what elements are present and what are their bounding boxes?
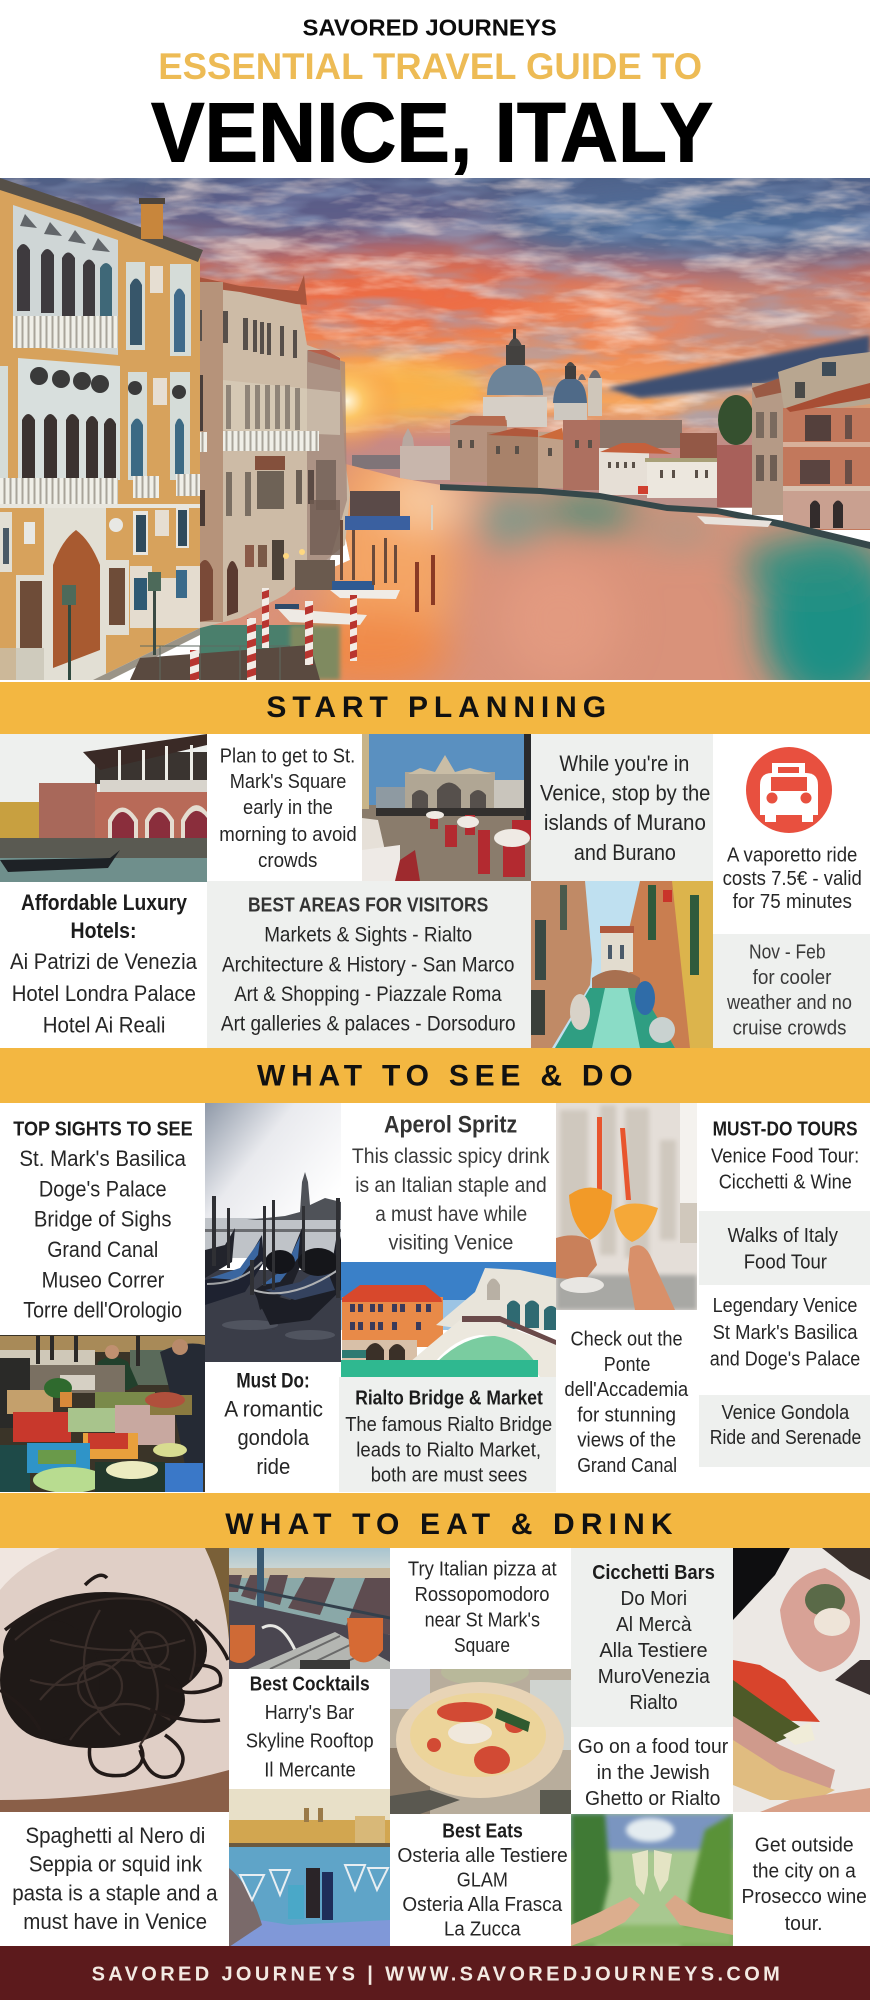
panel: squid ink pasta description: Spaghetti al Nero di <box>26 1823 205 1848</box>
panel: Prosecco wine tour tip: the city on a <box>753 1861 857 1883</box>
panel: must-do tours: Cicchetti & Wine <box>719 1172 852 1194</box>
panel: vaporetto tip: for 75 minutes <box>733 891 852 913</box>
panel: affordable luxury hotels: Hotels: <box>70 918 136 943</box>
panel: must do gondola ride: Must Do: <box>236 1370 310 1393</box>
panel: Rialto Bridge and Market: leads to Rialto Market, <box>356 1440 541 1462</box>
photo: Rialto market produce stall <box>0 1335 205 1492</box>
panel: Prosecco wine tour tip <box>733 1812 870 1946</box>
panel: pizza at Rossopomodoro tip: near St Mark's <box>425 1610 540 1632</box>
panel: Ponte dell'Accademia tip <box>556 1310 699 1492</box>
panel: Walks of Italy tour <box>699 1211 870 1285</box>
footer <box>0 1946 870 2000</box>
panel: affordable luxury hotels <box>0 882 207 1048</box>
panel: Rialto Bridge and Market <box>339 1377 556 1492</box>
panel: gondola ride tour: Venice Gondola <box>722 1402 850 1424</box>
panel: best areas for visitors: Markets & Sights - Rialto <box>264 924 472 947</box>
panel: best eats: Osteria Alla Frasca <box>402 1894 563 1916</box>
distant church and shore <box>352 428 452 480</box>
panel: Rialto Bridge and Market: Rialto Bridge & Market <box>355 1387 543 1409</box>
panel: pizza at Rossopomodoro tip: Square <box>454 1635 510 1657</box>
panel: best time to visit: for cooler <box>753 967 832 989</box>
title: VENICE, ITALY <box>151 86 713 180</box>
panel: must-do tours: Venice Food Tour: <box>711 1146 859 1168</box>
panel: Aperol Spritz: is an Italian staple and <box>355 1174 547 1197</box>
panel: best eats <box>390 1814 571 1947</box>
panel: best cocktails: Harry's Bar <box>265 1702 354 1724</box>
panel: St Mark's Square tip: Mark's Square <box>230 771 346 793</box>
panel: cicchetti bars: Alla Testiere <box>599 1640 708 1662</box>
panel: St Mark's Square tip <box>207 734 362 882</box>
photo: pizza margherita <box>390 1669 571 1814</box>
panel: must do gondola ride <box>205 1362 341 1492</box>
panel: Murano and Burano tip <box>531 734 713 881</box>
panel: best time to visit <box>713 934 870 1048</box>
panel: affordable luxury hotels: Hotel Londra Palace <box>12 981 196 1006</box>
panel: Ponte dell'Accademia tip: Ponte <box>604 1354 650 1376</box>
photo: rooftop cocktails <box>229 1548 390 1669</box>
panel: best areas for visitors: Architecture & History - San Marco <box>222 954 514 977</box>
panel: Murano and Burano tip: Venice, stop by the <box>540 781 710 806</box>
panel: affordable luxury hotels: Hotel Ai Reali <box>43 1013 165 1038</box>
dock and lanterns <box>62 572 320 680</box>
panel: Murano and Burano tip: While you're in <box>559 751 689 776</box>
panel: top sights to see: Torre dell'Orologio <box>23 1298 182 1323</box>
shoreline <box>440 484 870 549</box>
footer: SAVORED JOURNEYS | WWW.SAVOREDJOURNEYS.COM <box>92 1964 780 1986</box>
panel: best areas for visitors <box>207 881 531 1048</box>
panel: must do gondola ride: ride <box>256 1454 290 1479</box>
panel: cicchetti bars: Al Mercà <box>616 1614 692 1636</box>
panel: cicchetti bars: MuroVenezia <box>598 1666 711 1688</box>
panel: vaporetto tip <box>713 734 870 934</box>
panel: best eats: Osteria alle Testiere <box>397 1845 568 1867</box>
panel: Jewish Ghetto food tour tip: in the Jewish <box>597 1762 710 1784</box>
panel: best eats: Best Eats <box>442 1821 523 1843</box>
panel: vaporetto tip: costs 7.5€ - valid <box>723 868 862 890</box>
panel: best cocktails <box>229 1669 390 1789</box>
panel: gondola ride tour <box>699 1395 870 1467</box>
panel: St Mark's Square tip: crowds <box>258 850 317 872</box>
panel: Walks of Italy tour: Walks of Italy <box>728 1225 838 1247</box>
panel: Jewish Ghetto food tour tip <box>571 1727 733 1814</box>
panel: squid ink pasta description <box>0 1812 229 1947</box>
panel: squid ink pasta description: pasta is a staple and a <box>12 1881 218 1906</box>
photo: waterfront dining table <box>229 1789 390 1946</box>
panel: Aperol Spritz <box>341 1103 556 1262</box>
panel: Ponte dell'Accademia tip: Grand Canal <box>577 1455 677 1477</box>
photo: colourful side canal <box>531 881 713 1048</box>
panel: top sights to see: St. Mark's Basilica <box>19 1146 187 1171</box>
panel: best areas for visitors: Art galleries & palaces - Dorsoduro <box>221 1013 516 1036</box>
panel: must do gondola ride: A romantic <box>224 1397 323 1422</box>
hero photo: Grand Canal at sunset <box>0 178 870 680</box>
left cream palazzo <box>193 275 350 628</box>
panel: best time to visit: Nov - Feb <box>749 942 826 964</box>
panel: Legendary Venice tour: St Mark's Basilica <box>713 1322 858 1344</box>
boats and striped poles <box>190 491 410 680</box>
panel: Jewish Ghetto food tour tip: Go on a food tour <box>578 1736 729 1758</box>
photo: Rialto market building <box>0 734 207 882</box>
panel: Prosecco wine tour tip: tour. <box>785 1913 822 1935</box>
distant palazzi <box>450 416 753 507</box>
panel: Walks of Italy tour: Food Tour <box>744 1252 827 1274</box>
panel: pizza at Rossopomodoro tip: Try Italian pizza at <box>408 1559 557 1581</box>
panel: top sights to see <box>0 1103 205 1335</box>
panel: affordable luxury hotels: Ai Patrizi de Venezia <box>10 949 198 974</box>
panel: Rialto Bridge and Market: both are must sees <box>371 1465 527 1487</box>
panel: St Mark's Square tip: early in the <box>243 797 333 819</box>
panel: Aperol Spritz: visiting Venice <box>388 1232 513 1255</box>
photo: gondolas <box>205 1103 341 1362</box>
panel: cicchetti bars: Cicchetti Bars <box>592 1562 715 1584</box>
photo: St Mark's Square cafe tables <box>362 734 531 881</box>
photo: squid ink pasta <box>0 1548 229 1812</box>
panel: top sights to see: Museo Correr <box>42 1268 164 1293</box>
boats at right <box>697 516 772 527</box>
section header: what to eat and drink: WHAT TO EAT & DRINK <box>225 1508 673 1541</box>
panel: top sights to see: Grand Canal <box>47 1237 158 1262</box>
panel: Prosecco wine tour tip: Get outside <box>755 1835 854 1857</box>
ochre Gothic palace <box>0 178 203 680</box>
panel: must-do tours <box>699 1103 870 1211</box>
panel: best areas for visitors: Art & Shopping - Piazzale Roma <box>234 983 502 1006</box>
panel: affordable luxury hotels: Affordable Luxury <box>21 890 188 915</box>
panel: top sights to see: TOP SIGHTS TO SEE <box>13 1119 193 1141</box>
subtitle: ESSENTIAL TRAVEL GUIDE TO <box>158 46 702 87</box>
panel: pizza at Rossopomodoro tip <box>390 1548 571 1669</box>
panel: Jewish Ghetto food tour tip: Ghetto or Rialto <box>585 1788 720 1810</box>
panel: best time to visit: cruise crowds <box>733 1018 846 1040</box>
panel: Ponte dell'Accademia tip: Check out the <box>570 1329 683 1351</box>
panel: Aperol Spritz: a must have while <box>375 1203 527 1226</box>
panel: Legendary Venice tour <box>699 1285 870 1395</box>
photo: Rialto Bridge <box>341 1262 556 1377</box>
panel: pizza at Rossopomodoro tip: Rossopomodoro <box>415 1584 550 1606</box>
poles in canal <box>415 505 435 612</box>
panel: best eats: GLAM <box>457 1870 508 1892</box>
panel: vaporetto tip: A vaporetto ride <box>727 845 857 867</box>
panel: best cocktails: Best Cocktails <box>250 1674 370 1696</box>
right palazzi <box>718 352 870 530</box>
panel: squid ink pasta description: must have in Venice <box>23 1909 207 1934</box>
icon: vaporetto bus <box>746 747 832 833</box>
brand heading: SAVORED JOURNEYS <box>302 15 557 41</box>
section header: what to see and do: WHAT TO SEE & DO <box>257 1060 633 1093</box>
panel: best cocktails: Il Mercante <box>264 1760 356 1782</box>
panel: Ponte dell'Accademia tip: for stunning <box>577 1405 676 1427</box>
panel: cicchetti bars <box>571 1548 733 1727</box>
panel: Aperol Spritz: Aperol Spritz <box>384 1112 517 1139</box>
panel: St Mark's Square tip: morning to avoid <box>219 824 357 846</box>
panel: best time to visit: weather and no <box>726 992 852 1014</box>
panel: Aperol Spritz: This classic spicy drink <box>352 1145 550 1168</box>
section header: what to eat and drink <box>0 1493 870 1548</box>
domes of Santa Maria della Salute <box>483 329 602 427</box>
panel: top sights to see: Doge's Palace <box>39 1177 167 1202</box>
panel: Murano and Burano tip: and Burano <box>574 840 676 865</box>
panel: cicchetti bars: Rialto <box>629 1692 678 1714</box>
photo: prosecco toast in vineyard <box>571 1814 733 1946</box>
panel: Rialto Bridge and Market: The famous Rialto Bridge <box>345 1414 552 1436</box>
panel: Ponte dell'Accademia tip: dell'Accademia <box>564 1379 689 1401</box>
panel: top sights to see: Bridge of Sighs <box>34 1207 172 1232</box>
panel: Murano and Burano tip: islands of Murano <box>544 810 706 835</box>
photo: aperol spritz toast <box>556 1103 697 1310</box>
panel: best areas for visitors: BEST AREAS FOR VISITORS <box>248 895 488 917</box>
section header: start planning <box>0 682 870 734</box>
panel: Legendary Venice tour: Legendary Venice <box>713 1295 858 1317</box>
canal water <box>200 464 870 680</box>
panel: squid ink pasta description: Seppia or squid ink <box>29 1852 203 1877</box>
section header: start planning: START PLANNING <box>266 691 606 724</box>
panel: cicchetti bars: Do Mori <box>620 1588 687 1610</box>
panel: St Mark's Square tip: Plan to get to St. <box>220 745 355 767</box>
section header: what to see and do <box>0 1048 870 1103</box>
panel: Ponte dell'Accademia tip: views of the <box>577 1430 676 1452</box>
panel: best cocktails: Skyline Rooftop <box>246 1731 374 1753</box>
panel: must do gondola ride: gondola <box>238 1425 310 1450</box>
panel: best eats: La Zucca <box>444 1919 521 1941</box>
panel: Prosecco wine tour tip: Prosecco wine <box>742 1886 867 1908</box>
photo: cicchetti sandwiches <box>733 1548 870 1812</box>
